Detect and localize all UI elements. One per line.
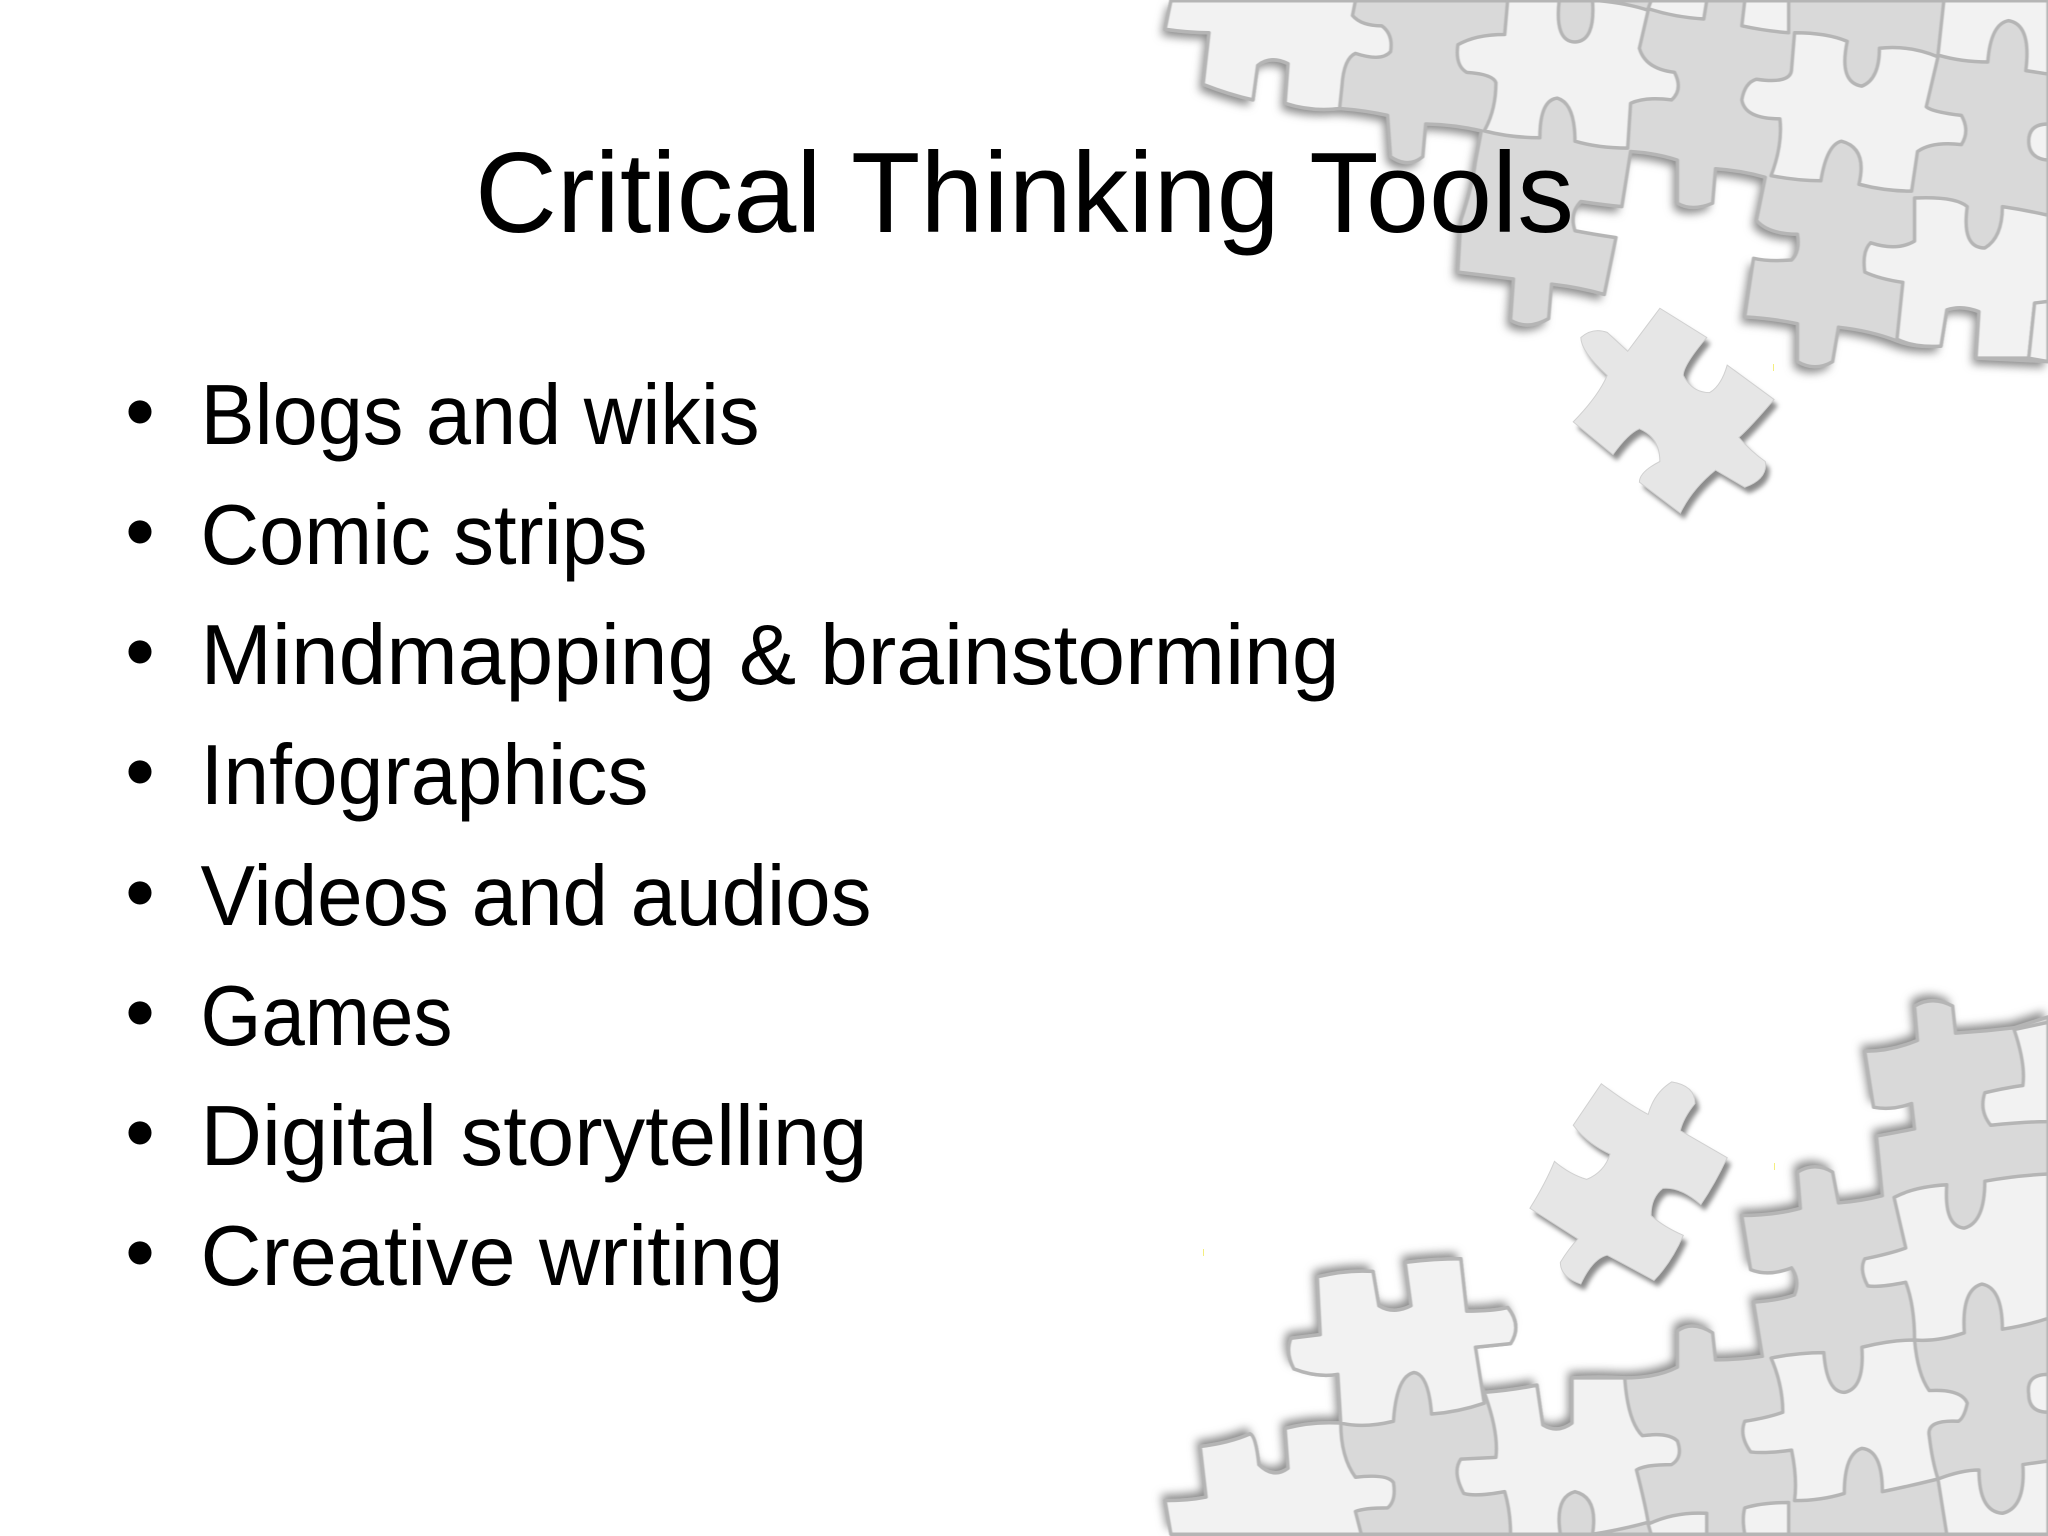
puzzle cluster: bottom right [1161, 995, 2048, 1534]
puzzle cluster: top right [1161, 1, 2048, 373]
light puzzle pieces: bottom [1165, 1022, 2048, 1534]
dark puzzle base: bottom [1165, 1001, 2048, 1534]
bullet item: Games [125, 965, 452, 1064]
bullet item: Mindmapping & brainstorming: Mindmapping & brainstorming [200, 608, 1340, 703]
bullet item: Games: • [125, 965, 155, 1060]
light puzzle pieces: top [1165, 1, 2048, 362]
bullet item: Creative writing: Creative writing [200, 1209, 784, 1304]
bullet item: Digital storytelling: Digital storytelling [200, 1089, 868, 1184]
title: Critical Thinking Tools [475, 130, 1574, 257]
bullet item: Blogs and wikis: • [125, 364, 155, 459]
bullet list [125, 364, 1340, 1304]
bullet item: Videos and audios: • [125, 845, 155, 940]
loose puzzle piece: bottom [1530, 1082, 1731, 1290]
bullet item: Infographics: • [125, 724, 155, 819]
bullet item: Comic strips: • [125, 484, 155, 579]
bullet item: Videos and audios: Videos and audios [200, 849, 872, 944]
bullet item: Infographics: Infographics [200, 728, 648, 823]
bullet item: Digital storytelling: • [125, 1085, 155, 1180]
bullet item: Comic strips: Comic strips [200, 488, 648, 583]
loose puzzle piece: top [1573, 308, 1778, 519]
bullet item: Creative writing: • [125, 1205, 155, 1300]
bullet item: Blogs and wikis: Blogs and wikis [200, 368, 760, 463]
bullet item: Mindmapping & brainstorming: • [125, 604, 155, 699]
dark puzzle base: top [1165, 1, 2048, 367]
bullet item: Games: Games [200, 969, 452, 1064]
